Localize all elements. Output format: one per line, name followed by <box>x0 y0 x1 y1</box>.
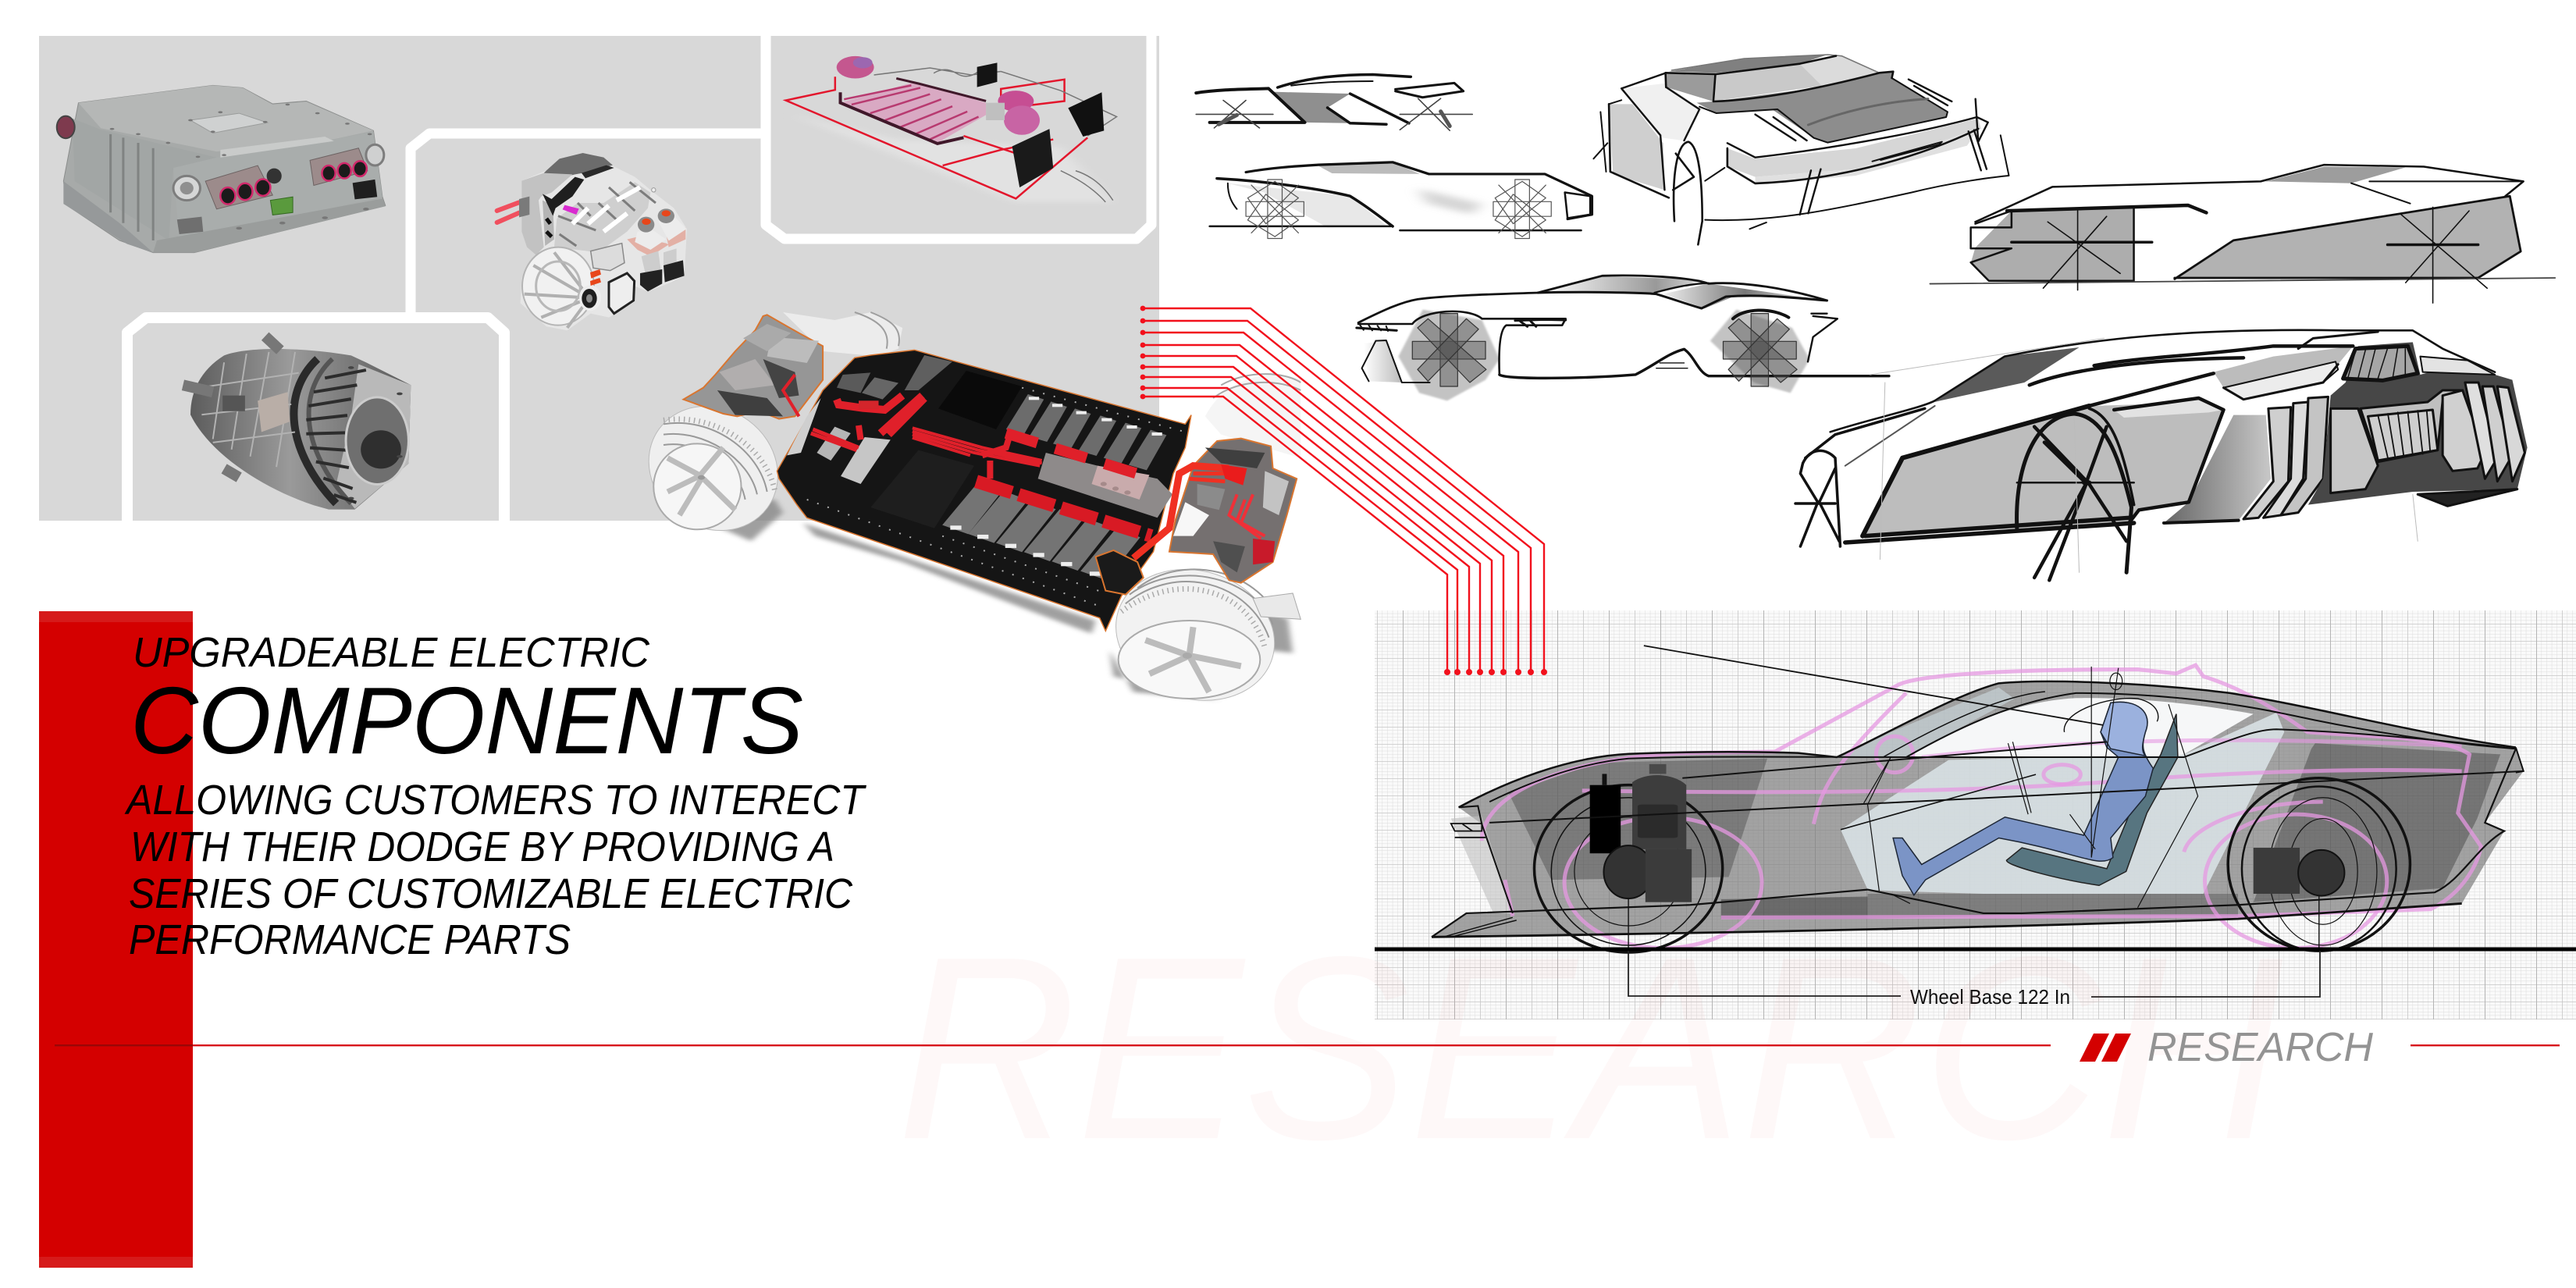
image: drive unit <box>497 153 687 330</box>
connector end dots <box>1444 610 1547 675</box>
red side block <box>39 611 193 1268</box>
seat <box>2006 714 2178 885</box>
large sketch: front nose <box>1795 406 1935 546</box>
body text: WITH THEIR DODGE BY PROVIDING A <box>130 824 834 870</box>
sketch: small side view <box>1196 75 1472 130</box>
dimension: wheel base <box>1628 951 2320 1009</box>
chassis: battery tray <box>777 350 1191 631</box>
image: inverter box <box>57 85 386 253</box>
package drawing: grid background <box>1375 610 2576 1019</box>
sketch: three-quarter front view <box>1593 55 2009 244</box>
large sketch: contour lines <box>1863 406 2089 536</box>
body lines and ergonomics <box>1432 646 2524 937</box>
chassis: module tabs <box>950 397 1162 576</box>
chassis: wheel shadows <box>664 500 1293 700</box>
chassis: front wheel <box>637 312 902 536</box>
sketch: side view shaded <box>1930 165 2555 303</box>
ground line <box>1375 948 2576 951</box>
body text <box>124 777 867 963</box>
package drawing: side-view car <box>1432 646 2524 952</box>
connector lines: chassis to package drawing <box>1140 306 1544 672</box>
body text: ALLOWING CUSTOMERS TO INTERECT <box>124 777 867 824</box>
seated driver figure <box>1893 702 2153 895</box>
chassis: upper battery modules <box>1006 394 1166 470</box>
section label: research: RESEARCH <box>2147 1025 2373 1070</box>
chassis: rear wheels <box>1095 374 1300 711</box>
large sketch: side panel <box>1865 402 2224 536</box>
large sketch: roof window <box>1935 347 2080 402</box>
pink reference car outline <box>1482 665 2481 948</box>
large sketch: headlight and hood <box>2214 346 2353 388</box>
sketch: large perspective concept <box>1795 330 2528 580</box>
sketch: side view with grey wheels <box>1357 276 1889 400</box>
chassis: red cabling <box>781 376 1154 536</box>
front motor and battery block <box>1590 764 1692 902</box>
image: cooling schematic <box>786 56 1117 202</box>
dark engine bays <box>1509 759 1767 880</box>
chassis: rear motor and inverter <box>1096 439 1297 595</box>
chassis: front motor <box>684 315 823 419</box>
image: electric motor <box>183 336 411 510</box>
chassis: tray cavities <box>787 355 1185 607</box>
chassis: lower battery modules <box>942 482 1140 580</box>
large sketch: dark front mask <box>2308 342 2528 505</box>
cabin glass <box>1841 713 2284 894</box>
rear wheel <box>2228 778 2410 951</box>
front wheel <box>1534 785 1723 952</box>
watermark: research: RESEARCH <box>897 902 2286 1194</box>
icon: double slash <box>2080 1034 2131 1062</box>
image: EV chassis with battery <box>637 312 1300 711</box>
background panel: component photos <box>39 36 1159 521</box>
heading: upgradeable electric: UPGRADEABLE ELECTRIC <box>133 629 650 676</box>
chassis: central pack <box>1038 453 1172 518</box>
car body shell <box>1432 681 2524 937</box>
heading: components: COMPONENTS <box>130 667 803 774</box>
section rule <box>55 1044 2560 1046</box>
large sketch: vertical strakes <box>2243 397 2328 519</box>
dimension: wheel base: Wheel Base 122 In <box>1910 985 2070 1009</box>
sketch: side view with hex wheels <box>1210 162 1592 238</box>
body text: PERFORMANCE PARTS <box>129 916 571 963</box>
large sketch: wheel arch and spokes <box>2017 408 2134 580</box>
rear motor <box>2254 848 2344 895</box>
body text: SERIES OF CUSTOMIZABLE ELECTRIC <box>129 870 853 917</box>
